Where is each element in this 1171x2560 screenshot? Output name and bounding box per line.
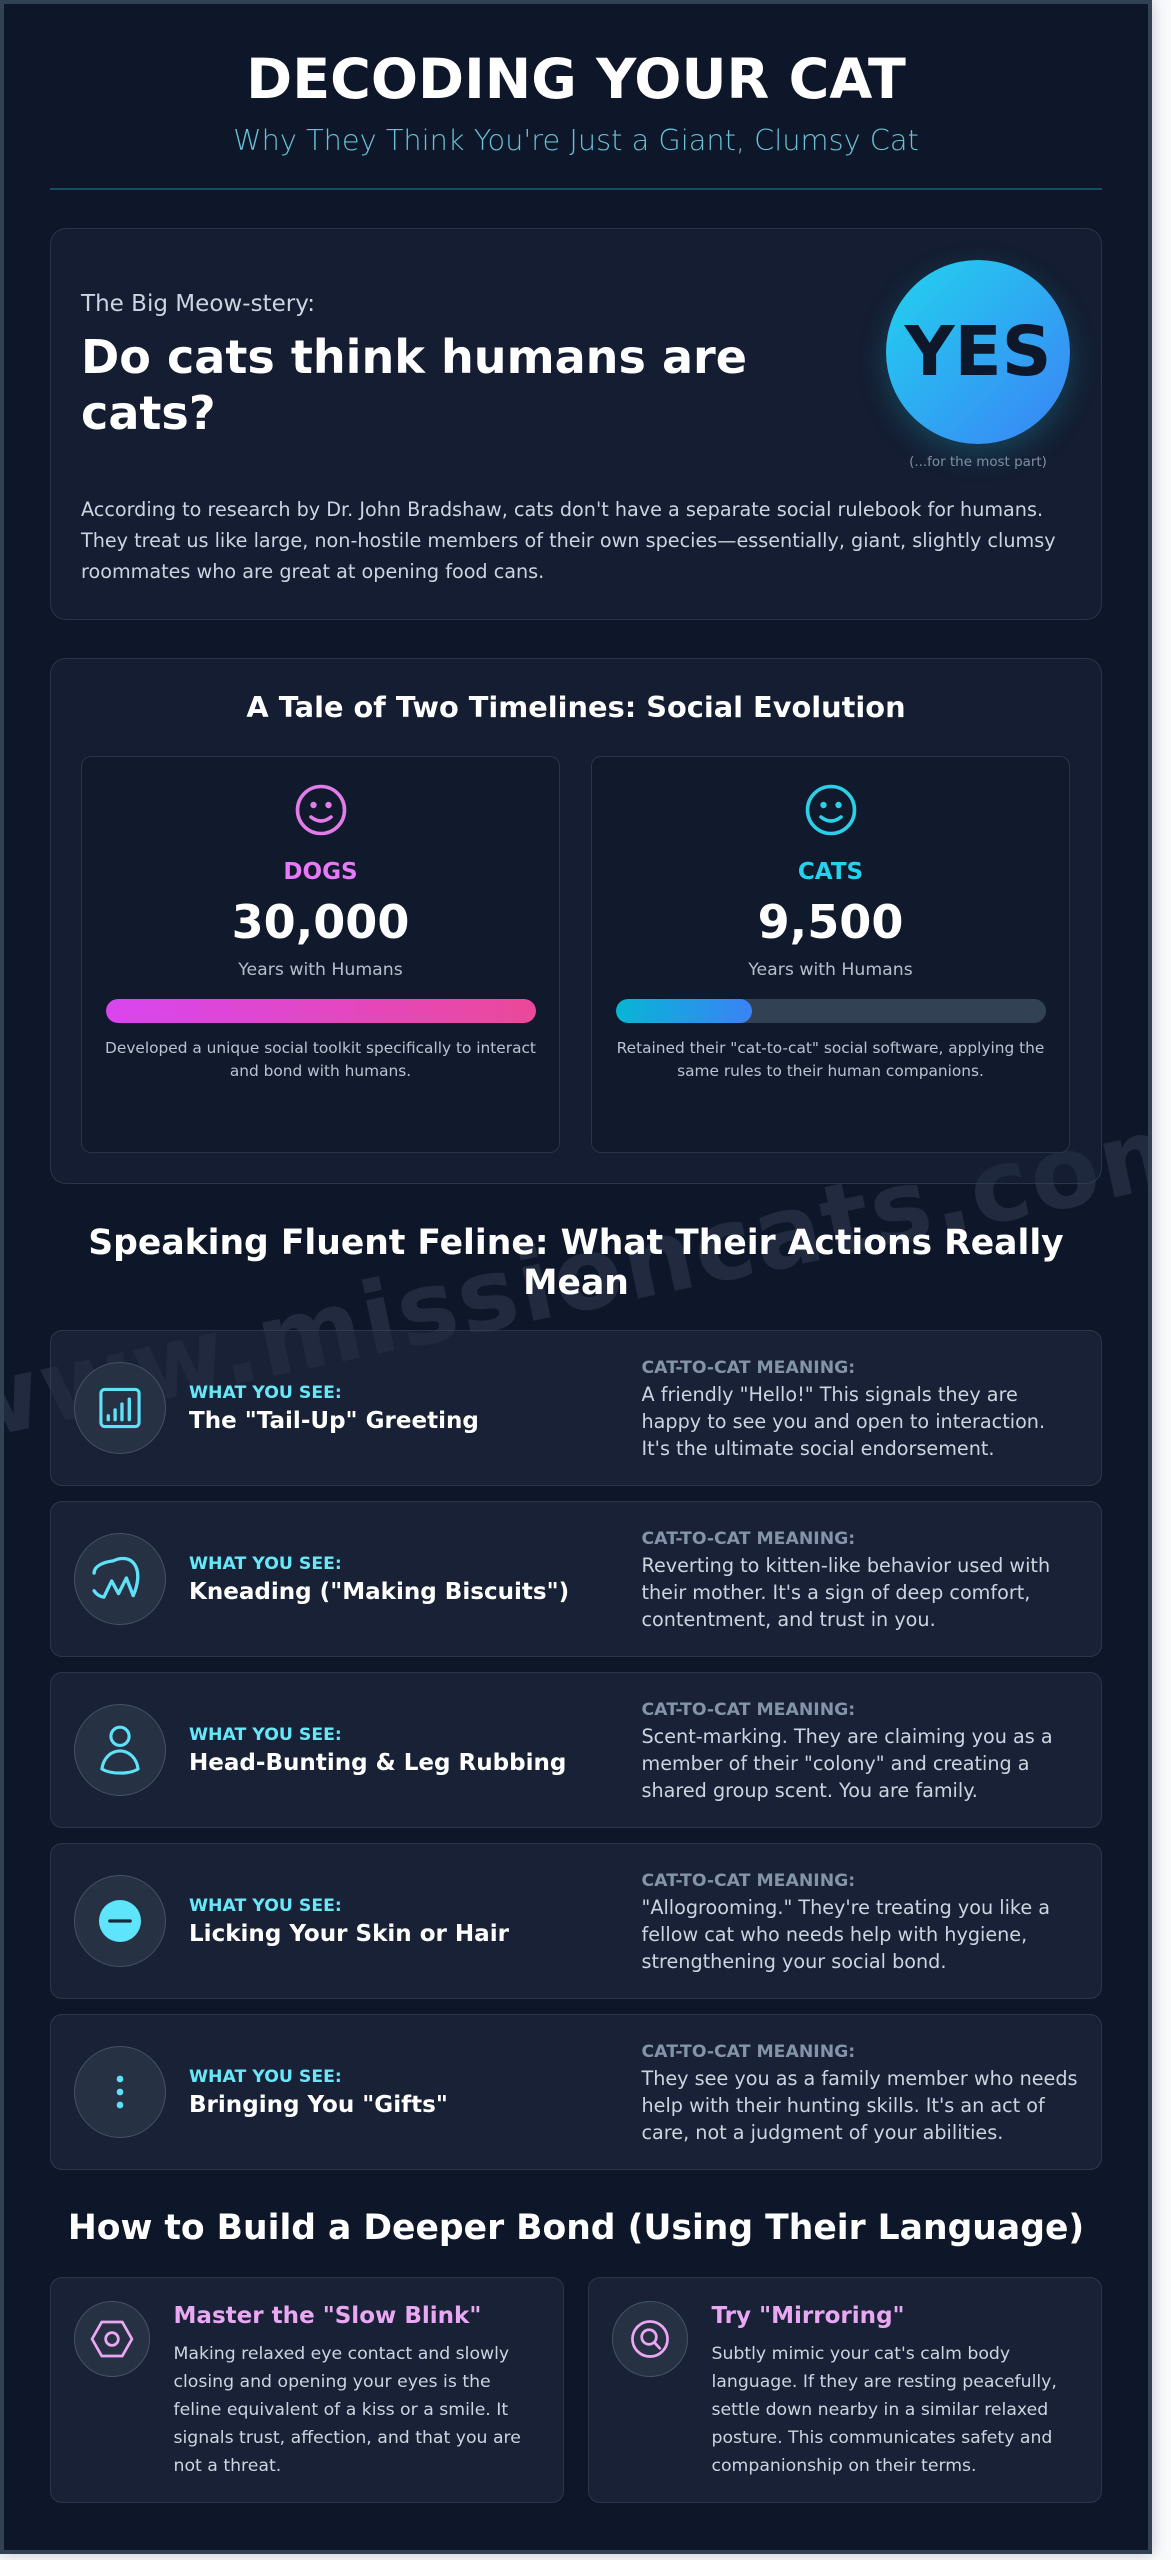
intro paragraph: roommates who are great at opening food cans. <box>81 560 544 583</box>
tip text: feline equivalent of a kiss or a smile. It <box>174 2400 508 2420</box>
meaning text <box>642 1896 1050 1973</box>
meaning label: CAT-TO-CAT MEANING: <box>642 1871 855 1891</box>
meaning text: They see you as a family member who needs <box>642 2067 1078 2090</box>
what you see label: WHAT YOU SEE: <box>189 1382 342 1402</box>
meaning text: shared group scent. You are family. <box>642 1779 978 1802</box>
badge caption: (...for the most part) <box>909 455 1047 470</box>
row: gifts <box>50 2014 1102 2170</box>
intro paragraph: They treat us like large, non-hostile members of their own species—essentially, giant, slightly clumsy <box>81 529 1056 552</box>
tip card: slow blink <box>50 2277 564 2503</box>
tip text: closing and opening your eyes is the <box>174 2372 491 2392</box>
meaning text <box>641 2067 1078 2144</box>
behaviour title: Kneading ("Making Biscuits") <box>189 1579 569 1605</box>
tip title: Try "Mirroring" <box>712 2302 905 2328</box>
heading: speaking fluent feline: Speaking Fluent Feline: What Their Actions Really <box>88 1222 1064 1262</box>
tip text: language. If they are resting peacefully, <box>712 2372 1057 2392</box>
tip text: signals trust, affection, and that you are <box>174 2428 521 2448</box>
what you see label: WHAT YOU SEE: <box>189 1896 342 1916</box>
tip text: Subtly mimic your cat's calm body <box>712 2344 1010 2364</box>
icon: magnifier circle <box>612 2301 688 2377</box>
meaning text <box>642 1383 1045 1460</box>
tip text: posture. This communicates safety and <box>712 2428 1052 2448</box>
years label: Years with Humans <box>238 960 403 980</box>
meaning text: member of their "colony" and creating a <box>642 1752 1030 1775</box>
meaning text: Scent-marking. They are claiming you as a <box>642 1725 1053 1748</box>
tip text: settle down nearby in a similar relaxed <box>712 2400 1048 2420</box>
question heading <box>81 330 747 440</box>
label: cats: CATS <box>798 858 863 884</box>
icon: three dots <box>74 2046 166 2138</box>
icon: filled minus circle <box>74 1875 166 1967</box>
description <box>105 1039 536 1080</box>
tip text: not a threat. <box>174 2456 281 2476</box>
meaning label: CAT-TO-CAT MEANING: <box>642 1358 855 1378</box>
meaning text <box>642 1554 1050 1631</box>
title: DECODING YOUR CAT <box>246 46 906 112</box>
tip text: companionship on their terms. <box>712 2456 977 2476</box>
behaviour title: Bringing You "Gifts" <box>189 2092 448 2118</box>
meaning label: CAT-TO-CAT MEANING: <box>642 2042 855 2062</box>
progress bar: cats <box>616 999 1046 1023</box>
meaning text: A friendly "Hello!" This signals they are <box>642 1383 1018 1406</box>
section heading: A Tale of Two Timelines: Social Evolution <box>246 690 906 724</box>
tip text: Making relaxed eye contact and slowly <box>174 2344 509 2364</box>
heading: build a deeper bond: How to Build a Deeper Bond (Using Their Language) <box>68 2208 1084 2248</box>
header divider line <box>50 188 1102 190</box>
row: kneading <box>50 1501 1102 1657</box>
meaning text: care, not a judgment of your abilities. <box>642 2121 1003 2144</box>
meaning text <box>642 1725 1053 1802</box>
icon: dog smile <box>296 784 346 836</box>
question heading: Do cats think humans are <box>81 330 747 384</box>
question heading: cats? <box>81 386 216 440</box>
behaviour title: Head-Bunting & Leg Rubbing <box>189 1750 566 1776</box>
number: 9,500: 9,500 <box>758 894 903 948</box>
description: and bond with humans. <box>230 1062 411 1080</box>
meaning text: Reverting to kitten-like behavior used with <box>642 1554 1050 1577</box>
tip card: mirroring <box>588 2277 1102 2503</box>
panel: social evolution timelines <box>50 658 1102 1184</box>
intro paragraph: According to research by Dr. John Bradshaw, cats don't have a separate social rulebook for humans. <box>81 498 1043 521</box>
card: cats <box>591 756 1070 1153</box>
what you see label: WHAT YOU SEE: <box>189 2066 342 2086</box>
years label: Years with Humans <box>748 960 913 980</box>
YES badge <box>886 260 1070 444</box>
progress bar: dogs <box>106 999 536 1023</box>
label: dogs: DOGS <box>283 858 358 884</box>
panel: the big meow-stery <box>50 228 1102 620</box>
description <box>617 1039 1044 1080</box>
meaning text: fellow cat who needs help with hygiene, <box>642 1923 1027 1946</box>
subtitle: Why They Think You're Just a Giant, Clumsy Cat <box>233 123 919 157</box>
meaning text: contentment, and trust in you. <box>642 1608 936 1631</box>
card: dogs <box>81 756 560 1153</box>
tip title: Master the "Slow Blink" <box>174 2302 481 2328</box>
icon: hexagon eye <box>74 2301 150 2377</box>
meaning label: CAT-TO-CAT MEANING: <box>642 1700 855 1720</box>
tip text <box>712 2344 1057 2476</box>
icon: cat smile <box>806 784 856 836</box>
description: Retained their "cat-to-cat" social software, applying the <box>617 1039 1044 1057</box>
number: 30,000: 30,000 <box>232 894 409 948</box>
what you see label: WHAT YOU SEE: <box>189 1724 342 1744</box>
icon: chart <box>74 1362 166 1454</box>
row: head-bunting <box>50 1672 1102 1828</box>
kicker: The Big Meow-stery: <box>81 291 315 317</box>
icon: person <box>74 1704 166 1796</box>
heading: speaking fluent feline <box>88 1222 1064 1302</box>
meaning text: strengthening your social bond. <box>642 1950 946 1973</box>
meaning text: It's the ultimate social endorsement. <box>642 1437 995 1460</box>
meaning text: help with their hunting skills. It's an act of <box>642 2094 1045 2117</box>
behaviour title: Licking Your Skin or Hair <box>189 1921 509 1947</box>
meaning text: "Allogrooming." They're treating you like a <box>642 1896 1050 1919</box>
description: same rules to their human companions. <box>677 1062 984 1080</box>
meaning text: their mother. It's a sign of deep comfort, <box>642 1581 1030 1604</box>
row: tail-up greeting <box>50 1330 1102 1486</box>
intro paragraph <box>80 498 1056 583</box>
description: Developed a unique social toolkit specifically to interact <box>105 1039 536 1057</box>
what you see label: WHAT YOU SEE: <box>189 1554 342 1574</box>
meaning label: CAT-TO-CAT MEANING: <box>642 1529 855 1549</box>
row: licking <box>50 1843 1102 1999</box>
heading: speaking fluent feline: Mean <box>523 1262 629 1302</box>
tip text <box>174 2344 521 2476</box>
meaning text: happy to see you and open to interaction. <box>642 1410 1045 1433</box>
YES badge: YES <box>905 312 1051 392</box>
behaviour title: The "Tail-Up" Greeting <box>189 1408 479 1434</box>
icon: kneading paw <box>74 1533 166 1625</box>
